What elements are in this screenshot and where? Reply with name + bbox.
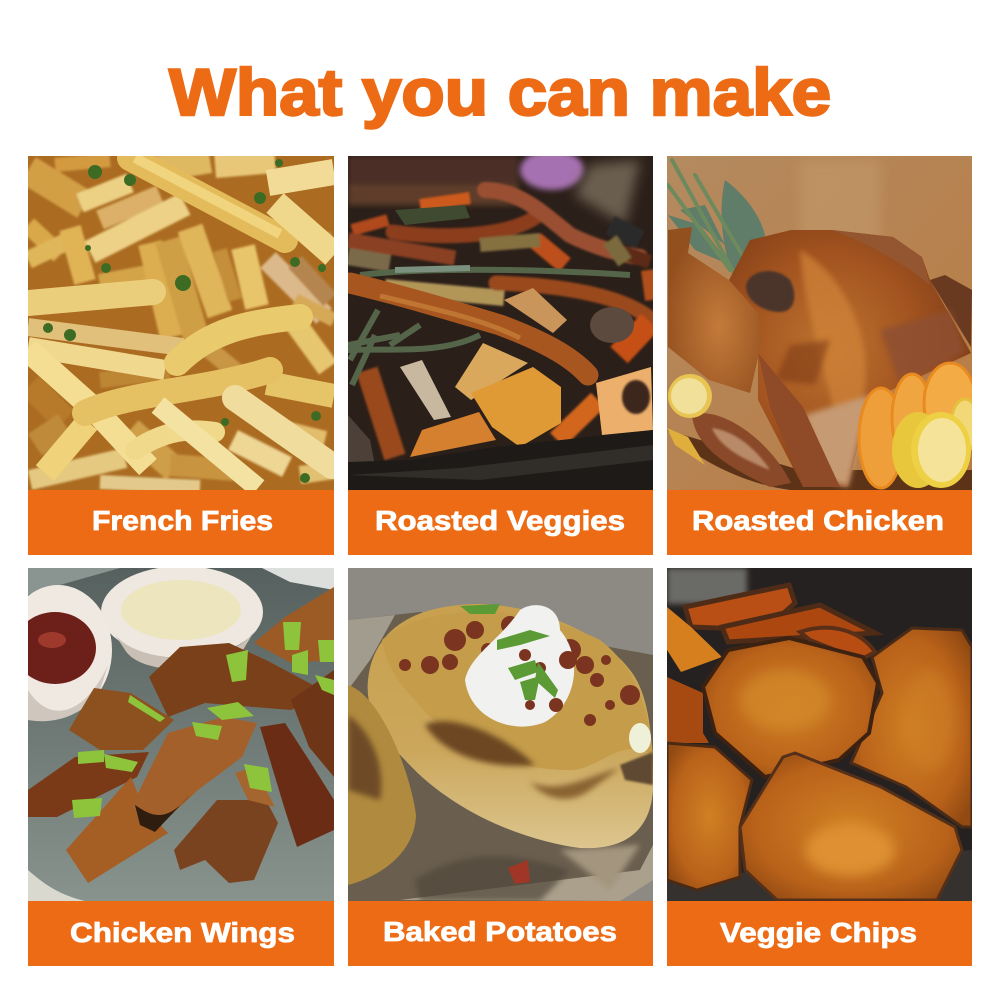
label bar: Veggie Chips bbox=[667, 901, 972, 966]
label bar: Roasted Veggies: Roasted Veggies bbox=[375, 505, 625, 536]
chives bbox=[460, 604, 558, 700]
label bar: Roasted Chicken bbox=[667, 490, 972, 555]
green onions bbox=[72, 622, 334, 818]
label bar: Baked Potatoes bbox=[348, 901, 653, 966]
label bar: Veggie Chips: Veggie Chips bbox=[720, 917, 917, 948]
sauce bowls bbox=[101, 566, 263, 658]
panel: Chicken Wings bbox=[4, 566, 334, 966]
front chip bbox=[740, 753, 962, 900]
photo: baked potatoes bbox=[348, 568, 653, 901]
pale breast lower bbox=[805, 395, 870, 487]
center chip bbox=[703, 638, 878, 777]
wings bbox=[254, 587, 334, 663]
panel: French Fries bbox=[28, 156, 334, 555]
plate bbox=[348, 612, 653, 901]
label bar: Chicken Wings bbox=[28, 901, 334, 966]
label bar: Roasted Veggies bbox=[348, 490, 653, 555]
label bar: French Fries bbox=[28, 490, 334, 555]
panel: Baked Potatoes bbox=[348, 568, 653, 966]
photo: chicken wings bbox=[4, 566, 334, 901]
back chips bbox=[685, 585, 795, 630]
panel: Roasted Veggies bbox=[348, 150, 653, 555]
title: What you can make bbox=[169, 55, 831, 129]
lemon slices bbox=[892, 412, 929, 488]
body bbox=[729, 230, 971, 487]
lower wing bbox=[692, 413, 791, 487]
lemon on left bbox=[668, 374, 712, 418]
parsnip chunks bbox=[504, 288, 567, 333]
label bar: Baked Potatoes: Baked Potatoes bbox=[383, 916, 617, 947]
panel: Roasted Chicken bbox=[667, 156, 979, 555]
label bar: Roasted Chicken: Roasted Chicken bbox=[692, 505, 944, 536]
photo: roasted veggies bbox=[348, 150, 653, 490]
photo: veggie chips bbox=[667, 568, 972, 901]
second potato bbox=[348, 685, 416, 885]
orange slices bbox=[859, 363, 979, 488]
plate bbox=[667, 430, 972, 490]
bacon bbox=[399, 616, 640, 726]
rosemary sprigs bbox=[348, 268, 630, 385]
herbs bbox=[43, 159, 326, 483]
photo: french fries bbox=[28, 156, 334, 490]
left-bottom chip bbox=[667, 743, 752, 890]
large carrot bbox=[350, 283, 588, 375]
photo: roasted chicken bbox=[667, 156, 979, 490]
label bar: Chicken Wings: Chicken Wings bbox=[70, 917, 295, 948]
herbs bbox=[668, 180, 765, 282]
leg bbox=[758, 353, 840, 487]
drumstick bbox=[668, 227, 762, 393]
tray bbox=[348, 430, 653, 490]
potato bbox=[368, 604, 653, 848]
label bar: French Fries: French Fries bbox=[92, 505, 273, 536]
right chip bbox=[851, 628, 972, 827]
panel: Veggie Chips bbox=[667, 568, 972, 966]
sour cream bbox=[465, 605, 574, 727]
